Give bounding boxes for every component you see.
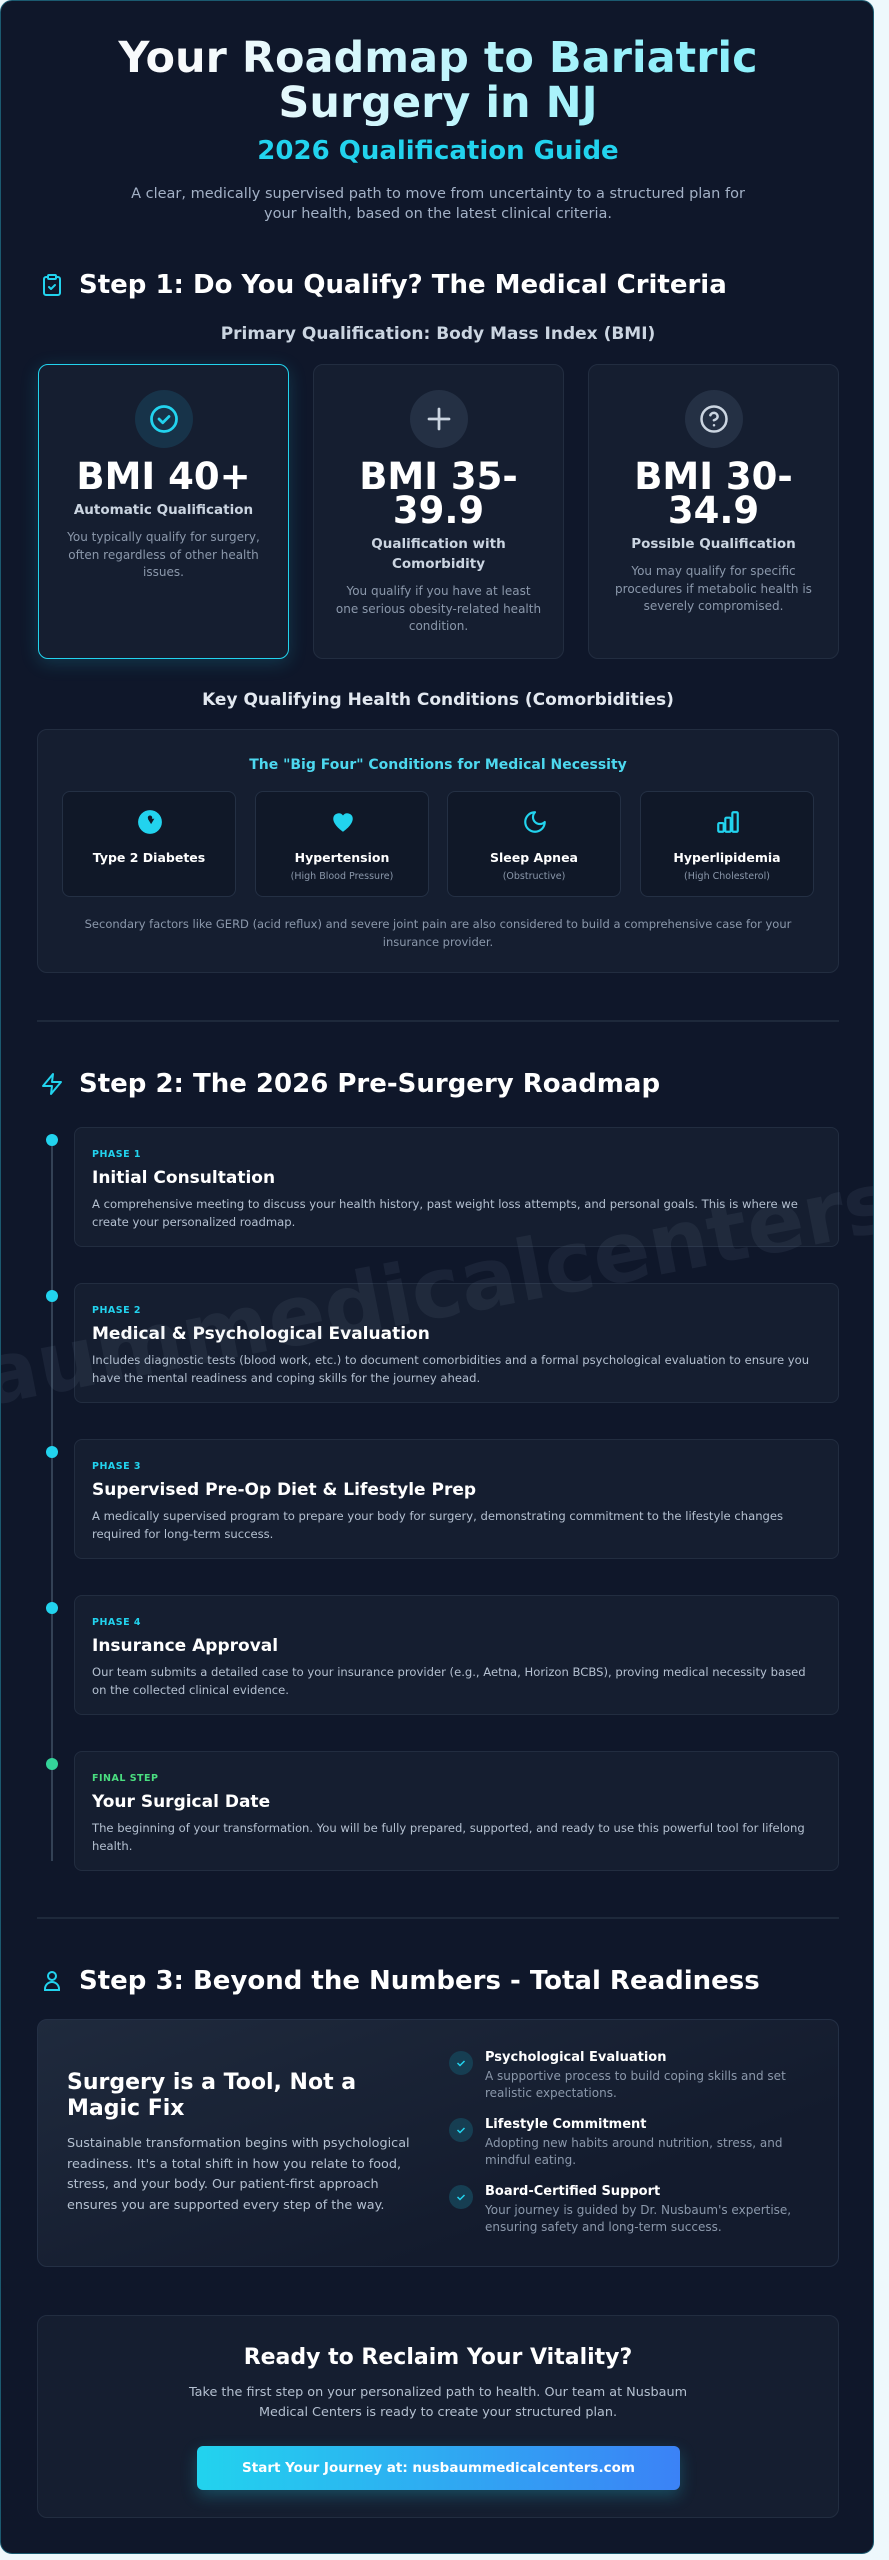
readiness text: ensures you are supported every step of the way. xyxy=(67,2198,384,2212)
phase 4: on the collected clinical evidence. xyxy=(92,1683,289,1697)
card: BMI 40+: You typically qualify for surgery, xyxy=(67,530,260,544)
item: lifestyle xyxy=(449,2118,473,2142)
phase 3: PHASE 3 xyxy=(92,1461,141,1472)
intro text xyxy=(131,186,745,222)
main card: Board-Certified Support xyxy=(485,2184,660,2199)
dot final xyxy=(46,1758,58,1770)
card: BMI 30-34.9 xyxy=(588,364,839,659)
phase 3 xyxy=(74,1439,839,1559)
panel: CTA: Take the first step on your personalized path to health. Our team at Nusbaum xyxy=(189,2385,687,2400)
phase 3: A medically supervised program to prepare your body for surgery, demonstrating commitment to the lifestyle changes required for long-term success. xyxy=(92,1509,783,1541)
phase 4: Insurance Approval xyxy=(92,1636,278,1656)
card: BMI 30-34.9: BMI 30- xyxy=(634,455,793,498)
readiness text: stress, and your body. Our patient-first approach xyxy=(67,2177,379,2192)
icon: plus xyxy=(410,390,468,448)
title: Surgery in NJ xyxy=(278,78,598,128)
button: Start Your Journey at: nusbaummedicalcenters.com xyxy=(242,2460,635,2476)
main card: Lifestyle Commitment xyxy=(485,2117,647,2132)
card: BMI 35-39.9: condition. xyxy=(409,619,468,633)
phase 4 xyxy=(74,1595,839,1715)
heading: step 3: Step 3: Beyond the Numbers - Total Readiness xyxy=(79,1966,760,1996)
card: BMI 35-39.9: Comorbidity xyxy=(392,556,485,572)
panel: big four: The "Big Four" Conditions for Medical Necessity xyxy=(249,757,627,773)
condition: sleep apnea: Sleep Apnea xyxy=(490,850,578,865)
final step: FINAL STEP xyxy=(92,1773,158,1784)
phase 2: Includes diagnostic tests (blood work, etc.) to document comorbidities and a formal psychological evaluation to ensure you have the mental readiness and coping skills for the journey ahead. xyxy=(92,1353,809,1385)
phase 4: PHASE 4 xyxy=(92,1617,141,1628)
card: BMI 30-34.9: You may qualify for specific xyxy=(631,564,796,578)
button xyxy=(197,2446,680,2490)
icon: question xyxy=(685,390,743,448)
main card: Adopting new habits around nutrition, stress, and xyxy=(485,2136,782,2150)
panel: big four xyxy=(37,729,839,973)
condition: diabetes: Type 2 Diabetes xyxy=(93,850,205,865)
card: BMI 35-39.9: BMI 35- xyxy=(359,455,518,498)
card: BMI 40+: often regardless of other health xyxy=(68,548,259,562)
heading: step 2: Step 2: The 2026 Pre-Surgery Roadmap xyxy=(79,1069,660,1099)
card: BMI 35-39.9: Qualification with xyxy=(371,536,506,552)
subheading: BMI: Primary Qualification: Body Mass Index (BMI) xyxy=(221,324,655,344)
card: BMI 40+: Automatic Qualification xyxy=(74,502,253,518)
readiness heading: Surgery is a Tool, Not a xyxy=(67,2070,356,2095)
card: BMI 30-34.9: procedures if metabolic health is xyxy=(615,582,812,596)
panel: readiness xyxy=(37,2019,839,2267)
item: support xyxy=(449,2185,473,2209)
final step: The beginning of your transformation. You will be fully prepared, supported, and ready to use this powerful tool for lifelong health. xyxy=(92,1821,805,1853)
dot 3 xyxy=(46,1446,58,1458)
condition: hypertension xyxy=(255,791,429,897)
panel: CTA xyxy=(37,2315,839,2518)
dot 2 xyxy=(46,1290,58,1302)
item: psychological xyxy=(449,2051,473,2075)
phase 1: PHASE 1 xyxy=(92,1149,141,1160)
card: BMI 30-34.9: severely compromised. xyxy=(644,599,783,613)
panel: CTA: Ready to Reclaim Your Vitality? xyxy=(244,2345,632,2370)
subtitle: 2026 Qualification Guide xyxy=(257,136,619,166)
timeline xyxy=(51,1146,53,1861)
card: BMI 40+: BMI 40+ xyxy=(76,455,251,498)
condition: sleep apnea xyxy=(447,791,621,897)
condition: hyperlipidemia: (High Cholesterol) xyxy=(684,871,770,882)
card: BMI 35-39.9: 39.9 xyxy=(393,489,484,532)
main card: Your journey is guided by Dr. Nusbaum's expertise, xyxy=(485,2203,791,2217)
panel: CTA: Medical Centers is ready to create your structured plan. xyxy=(259,2405,617,2420)
phase 1: Initial Consultation xyxy=(92,1168,275,1188)
phase 2: PHASE 2 xyxy=(92,1305,141,1316)
phase 1 xyxy=(74,1127,839,1247)
dot 4 xyxy=(46,1602,58,1614)
icon: zap xyxy=(42,1073,62,1095)
intro text: A clear, medically supervised path to move from uncertainty to a structured plan for xyxy=(131,186,745,202)
main card: ensuring safety and long-term success. xyxy=(485,2220,722,2234)
card: BMI 40+: issues. xyxy=(143,565,184,579)
phase 2: Medical & Psychological Evaluation xyxy=(92,1324,430,1344)
main card: realistic expectations. xyxy=(485,2086,617,2100)
panel: big four: insurance provider. xyxy=(383,935,493,949)
readiness text: Sustainable transformation begins with psychological xyxy=(67,2136,410,2151)
icon: check circle xyxy=(135,390,193,448)
final step xyxy=(74,1751,839,1871)
card: BMI 30-34.9: 34.9 xyxy=(668,489,759,532)
readiness heading: Magic Fix xyxy=(67,2096,184,2121)
condition: diabetes xyxy=(62,791,236,897)
panel: big four: Secondary factors like GERD (acid reflux) and severe joint pain are also considered to build a comprehensive case for your xyxy=(85,917,791,931)
icon: user xyxy=(44,1971,60,1991)
title: Your Roadmap to Bariatric xyxy=(118,33,758,83)
card: BMI 40+ xyxy=(38,364,289,659)
intro text: your health, based on the latest clinical criteria. xyxy=(264,206,612,222)
main card: Psychological Evaluation xyxy=(485,2050,666,2065)
card: BMI 30-34.9: Possible Qualification xyxy=(631,536,796,552)
icon: clipboard check xyxy=(43,274,61,296)
final step: Your Surgical Date xyxy=(92,1792,270,1812)
phase 3: Supervised Pre-Op Diet & Lifestyle Prep xyxy=(92,1480,476,1500)
card: BMI 35-39.9: You qualify if you have at least xyxy=(346,584,531,598)
condition: sleep apnea: (Obstructive) xyxy=(503,871,565,882)
condition: hypertension: (High Blood Pressure) xyxy=(291,871,393,882)
condition: hyperlipidemia: Hyperlipidemia xyxy=(673,850,781,865)
title xyxy=(37,36,839,126)
card: BMI 35-39.9: one serious obesity-related health xyxy=(336,602,541,616)
phase 2 xyxy=(74,1283,839,1403)
heading: step 1: Step 1: Do You Qualify? The Medical Criteria xyxy=(79,270,727,300)
condition: hypertension: Hypertension xyxy=(295,850,389,865)
readiness text: readiness. It's a total shift in how you relate to food, xyxy=(67,2156,401,2172)
heading: comorbidities: Key Qualifying Health Conditions (Comorbidities) xyxy=(202,690,674,710)
phase 4: Our team submits a detailed case to your insurance provider (e.g., Aetna, Horizon BCBS), proving medical necessity based xyxy=(92,1665,806,1679)
main card: A supportive process to build coping skills and set xyxy=(485,2069,786,2083)
main card: mindful eating. xyxy=(485,2153,576,2167)
condition: hyperlipidemia xyxy=(640,791,814,897)
dot 1 xyxy=(46,1134,58,1146)
phase 1: A comprehensive meeting to discuss your health history, past weight loss attempts, and personal goals. This is where we create your personalized roadmap. xyxy=(92,1197,798,1229)
readiness text xyxy=(67,2136,410,2212)
card: BMI 35-39.9 xyxy=(313,364,564,659)
readiness heading xyxy=(67,2070,356,2121)
